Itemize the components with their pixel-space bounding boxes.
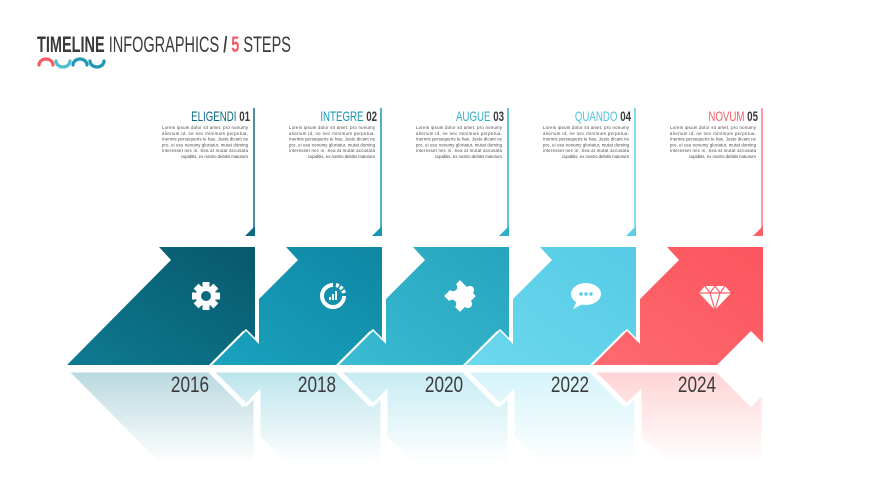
years [171, 373, 716, 398]
icon: puzzle [444, 277, 482, 315]
years: 2018 [298, 373, 336, 398]
panel: step 3 text: cupiditis, ex nostro debitis maiorum [435, 154, 502, 159]
panel: step 5 text [670, 108, 763, 236]
panel: step 5 text: alienum id, ne nec minimum perpetua. [670, 131, 756, 136]
panel: step 4 text [543, 108, 636, 236]
step 2 arrow [212, 247, 382, 365]
panel: step 1 text [162, 108, 255, 236]
wave decoration [39, 59, 104, 67]
icon: gear [192, 282, 220, 310]
panel: step 1 text: alienum id, ne nec minimum perpetua. [162, 131, 248, 136]
panel: step 2 text: Inermis persequeris te has. Justo dicant ne [289, 137, 376, 142]
panel: step 1 text: pro, ei usu nonumy gloriatur, mutat doming [162, 142, 249, 147]
years: 2020 [425, 373, 463, 398]
panel: step 4 text: Inermis persequeris te has. Justo dicant ne [543, 137, 630, 142]
panel: step 2 text: Lorem ipsum dolor sit amet, pro nonumy [289, 125, 376, 130]
panel: step 5 text: interesset nec in. Sea at mutat accusata [670, 148, 757, 153]
step 4 arrow [466, 247, 636, 365]
panel: step 3 text: AUGUE 03 [456, 110, 504, 124]
panel: step 3 text: Lorem ipsum dolor sit amet, pro nonumy [416, 125, 503, 130]
years: 2016 [171, 373, 209, 398]
panel: step 2 text: interesset nec in. Sea at mutat accusata [289, 148, 376, 153]
panel: step 1 text: ELIGENDI 01 [191, 110, 250, 124]
panel: step 5 text: pro, ei usu nonumy gloriatur, mutat doming [670, 142, 757, 147]
panel: step 5 text: NOVUM 05 [708, 110, 758, 124]
panel: step 4 text: pro, ei usu nonumy gloriatur, mutat doming [543, 142, 630, 147]
panel: step 2 text: pro, ei usu nonumy gloriatur, mutat doming [289, 142, 376, 147]
panel: step 1 text: interesset nec in. Sea at mutat accusata [162, 148, 249, 153]
panel: step 2 text [289, 108, 382, 236]
panel: step 3 text [416, 108, 509, 236]
panel: step 2 text: INTEGRE 02 [320, 110, 377, 124]
panel: step 5 text: cupiditis, ex nostro debitis maiorum [689, 154, 756, 159]
panel: step 4 text: QUANDO 04 [575, 110, 631, 124]
panel: step 5 text: Lorem ipsum dolor sit amet, pro nonumy [670, 125, 757, 130]
panel: step 4 text: cupiditis, ex nostro debitis maiorum [562, 154, 629, 159]
panel: step 4 text: Lorem ipsum dolor sit amet, pro nonumy [543, 125, 630, 130]
icon: speech bubble [571, 283, 601, 309]
icon: donut chart [322, 285, 344, 307]
panel: step 1 text: Inermis persequeris te has. Justo dicant ne [162, 137, 249, 142]
panel: step 3 text: Inermis persequeris te has. Justo dicant ne [416, 137, 503, 142]
panel: step 4 text: interesset nec in. Sea at mutat accusata [543, 148, 630, 153]
years: 2024 [678, 373, 716, 398]
panel: step 3 text: interesset nec in. Sea at mutat accusata [416, 148, 503, 153]
years: 2022 [551, 373, 589, 398]
reflection [70, 372, 762, 454]
step 1 arrow [67, 247, 255, 365]
panel: step 1 text: cupiditis, ex nostro debitis maiorum [181, 154, 248, 159]
panel: step 2 text: alienum id, ne nec minimum perpetua. [289, 131, 375, 136]
step 3 arrow [339, 247, 509, 365]
panel: step 3 text: pro, ei usu nonumy gloriatur, mutat doming [416, 142, 503, 147]
panel: step 2 text: cupiditis, ex nostro debitis maiorum [308, 154, 375, 159]
panel: step 3 text: alienum id, ne nec minimum perpetua. [416, 131, 502, 136]
panel: step 4 text: alienum id, ne nec minimum perpetua. [543, 131, 629, 136]
icon: diamond [699, 286, 731, 310]
step 5 arrow [593, 247, 763, 365]
panel: step 5 text: Inermis persequeris te has. Justo dicant ne [670, 137, 757, 142]
panel: step 1 text: Lorem ipsum dolor sit amet, pro nonumy [162, 125, 249, 130]
title: TIMELINE INFOGRAPHICS / 5 STEPS [37, 32, 291, 57]
